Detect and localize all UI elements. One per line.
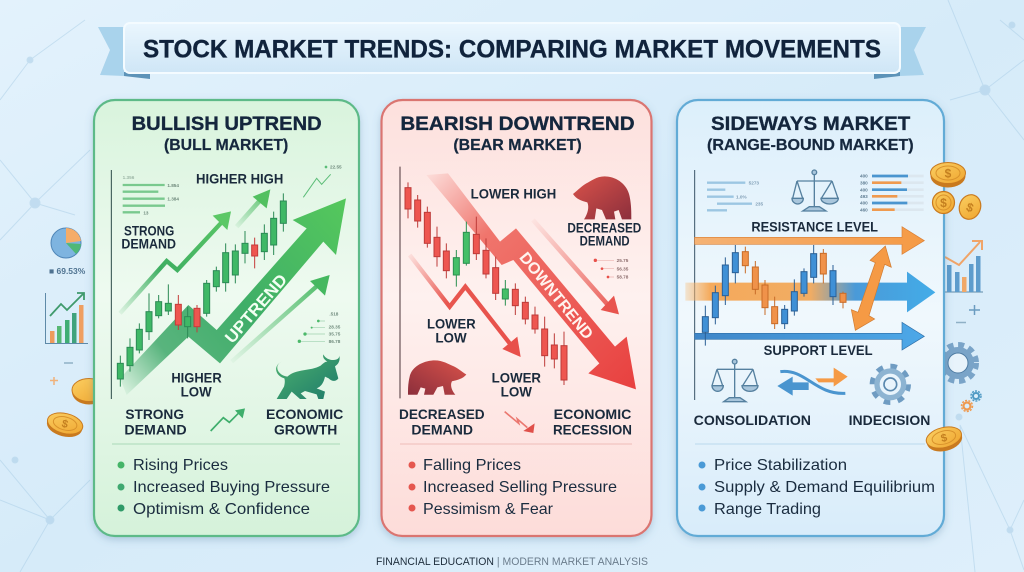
bullet list: Falling Prices — [423, 457, 521, 474]
mini data bars right: 400 — [860, 174, 868, 179]
label: strong demand lower: STRONG — [125, 406, 184, 422]
footer: FINANCIAL EDUCATION | MODERN MARKET ANALYSIS — [376, 556, 648, 568]
label: economic growth: ECONOMIC — [266, 406, 343, 422]
label: lower high: LOWER HIGH — [471, 185, 556, 201]
bullet list: Rising Prices — [133, 457, 228, 474]
chart axis — [398, 167, 401, 398]
bullet list: Range Trading — [714, 501, 821, 518]
label: indecision: INDECISION — [849, 412, 930, 428]
bullet list: Pessimism & Fear — [423, 501, 554, 518]
bullet list: Optimism & Confidence — [133, 501, 310, 518]
icon: balance scale lower — [712, 359, 758, 402]
coin: right middle right: $ — [964, 200, 976, 215]
arrow: upper trend — [120, 211, 231, 313]
panel: bearish downtrend — [382, 100, 652, 536]
mini legend values: 86.78 — [329, 339, 341, 344]
coin: left lower: $ — [60, 418, 69, 431]
icon: balance scale top — [792, 170, 838, 211]
label: decreased demand lower — [399, 406, 485, 437]
mini data bars: 1.854 — [167, 183, 179, 188]
mini legend values: 58.78 — [617, 275, 629, 280]
arrow: main downtrend — [426, 173, 636, 389]
panel subheading: (BULL MARKET) — [164, 137, 288, 154]
arrow: higher high — [237, 189, 270, 227]
mini data bars: 13 — [143, 210, 149, 215]
label: higher low: HIGHER — [171, 369, 222, 385]
bullet list — [698, 457, 935, 518]
mini trend line: 22.55 — [330, 165, 342, 170]
label: decreased demand upper: DECREASED — [567, 220, 641, 236]
ribbon tail right — [900, 27, 926, 76]
plus and minus marks — [50, 363, 73, 385]
mini legend values — [594, 258, 629, 280]
label: support level: SUPPORT LEVEL — [764, 342, 873, 358]
label: resistance level: RESISTANCE LEVEL — [751, 219, 878, 235]
label: decreased demand lower: DECREASED — [399, 406, 485, 422]
arrow: support — [695, 322, 924, 350]
title text: STOCK MARKET TRENDS: COMPARING MARKET MOVEMENTS — [143, 36, 881, 64]
bullet list: Increased Buying Pressure — [133, 479, 330, 496]
panel heading: BULLISH UPTREND — [132, 114, 322, 135]
label: lower low center — [492, 370, 541, 400]
icon: pie chart — [51, 228, 81, 258]
icon: small down arrow — [505, 412, 535, 433]
label: economic recession: RECESSION — [553, 421, 632, 437]
mini data bars right: 400 — [860, 201, 868, 206]
left side icons — [46, 228, 88, 385]
mini data bars left — [707, 180, 764, 210]
label: lower low left: LOW — [435, 329, 467, 345]
icon: gear — [873, 367, 908, 402]
title banner — [98, 23, 926, 79]
label: decreased demand upper: DEMAND — [580, 233, 630, 249]
label: lower low left — [427, 315, 476, 345]
mini data bars right — [860, 174, 924, 212]
arrow: central band — [685, 272, 935, 312]
mini legend values — [298, 312, 341, 344]
panel: sideways market — [677, 100, 944, 536]
mini data bars right: 493 — [860, 194, 868, 199]
label: economic recession — [553, 406, 632, 437]
candlestick chart — [702, 245, 846, 346]
coin: left lower — [45, 409, 85, 440]
mini data bars right: 380 — [860, 180, 868, 185]
bullet list — [118, 457, 330, 518]
label: uptrend: UPTREND — [221, 270, 291, 347]
pie chart percentage: ■ 69.53% — [49, 266, 86, 276]
mini legend values: 56.35 — [617, 266, 629, 271]
icon: small up arrow — [211, 408, 245, 431]
coin: right top — [930, 162, 966, 188]
icon: bar chart with up arrow — [46, 293, 88, 344]
label: strong demand lower — [124, 406, 187, 437]
chart axis — [693, 170, 696, 400]
mini data bars: 1.384 — [167, 197, 179, 202]
coin: left behind panel — [72, 378, 106, 404]
label: higher high: HIGHER HIGH — [196, 171, 283, 187]
arrow: lower low — [410, 255, 521, 357]
label: strong demand upper: STRONG — [124, 223, 174, 239]
mini data bars right: 400 — [860, 187, 868, 192]
coin: right middle left — [932, 192, 954, 214]
bullet list: Price Stabilization — [714, 457, 847, 474]
label: consolidation: CONSOLIDATION — [694, 412, 811, 428]
candlestick chart — [117, 193, 286, 387]
coin: right lower: $ — [940, 432, 949, 445]
panel heading: BEARISH DOWNTREND — [400, 114, 635, 135]
mini data bars — [123, 175, 179, 215]
plus and minus marks — [956, 305, 980, 322]
label: economic recession: ECONOMIC — [554, 406, 631, 422]
panel subheading: (RANGE-BOUND MARKET) — [707, 137, 914, 154]
bullet list: Supply & Demand Equilibrium — [714, 479, 935, 496]
label: higher low — [171, 369, 222, 400]
coin: right lower — [924, 423, 965, 455]
bullet list: Increased Selling Pressure — [423, 479, 617, 496]
icon: bar chart with orange arrow — [945, 241, 983, 292]
mini data bars right: 460 — [860, 207, 868, 212]
mini legend values: 25.75 — [617, 258, 629, 263]
label: strong demand lower: DEMAND — [124, 421, 187, 437]
coin: right middle right — [956, 192, 984, 222]
coin: right middle left: $ — [940, 196, 947, 210]
bullet list — [408, 457, 617, 518]
coin: right top: $ — [945, 166, 952, 180]
icon: bull — [276, 354, 340, 399]
mini legend values: 28.35 — [329, 324, 341, 329]
mini legend values: 35.75 — [329, 331, 341, 336]
label: economic growth — [266, 406, 343, 437]
label: decreased demand upper — [567, 220, 641, 249]
arrow: main uptrend — [120, 198, 346, 395]
label: strong demand upper — [121, 223, 176, 251]
label: strong demand upper: DEMAND — [121, 235, 176, 251]
panel heading: SIDEWAYS MARKET — [711, 114, 911, 135]
icon: swap arrows — [777, 368, 848, 396]
arrow: upper right — [533, 220, 619, 314]
label: downtrend: DOWNTREND — [516, 249, 596, 343]
icon: large gear — [940, 345, 976, 381]
mini legend values: .518 — [329, 312, 339, 317]
mini data bars left: 235 — [755, 201, 764, 206]
label: decreased demand lower: DEMAND — [411, 421, 473, 437]
icon: small blue gear — [971, 391, 981, 401]
label: lower low center: LOW — [501, 384, 533, 400]
right side icons behind panel — [940, 241, 983, 412]
panel: bullish uptrend — [94, 100, 359, 536]
icon: small orange gear — [962, 400, 972, 412]
ribbon tail left — [98, 27, 124, 76]
mini trend line — [303, 165, 342, 197]
label: lower low center: LOWER — [492, 370, 541, 386]
label: higher low: LOW — [181, 384, 212, 400]
mini data bars: 1.356 — [123, 175, 135, 180]
arrow: resistance — [695, 227, 924, 254]
label: lower low left: LOWER — [427, 315, 476, 331]
mini data bars left: 5273 — [749, 180, 759, 185]
mini data bars left: 1.0% — [736, 194, 747, 199]
icon: bear lower — [408, 360, 466, 395]
arrow: double orange — [851, 246, 891, 330]
chart axis — [110, 170, 113, 399]
icon: bear upper — [573, 176, 631, 219]
label: economic growth: GROWTH — [274, 421, 337, 437]
panel subheading: (BEAR MARKET) — [453, 137, 582, 154]
arrow: lower trend — [232, 275, 330, 362]
candlestick chart — [405, 182, 567, 385]
